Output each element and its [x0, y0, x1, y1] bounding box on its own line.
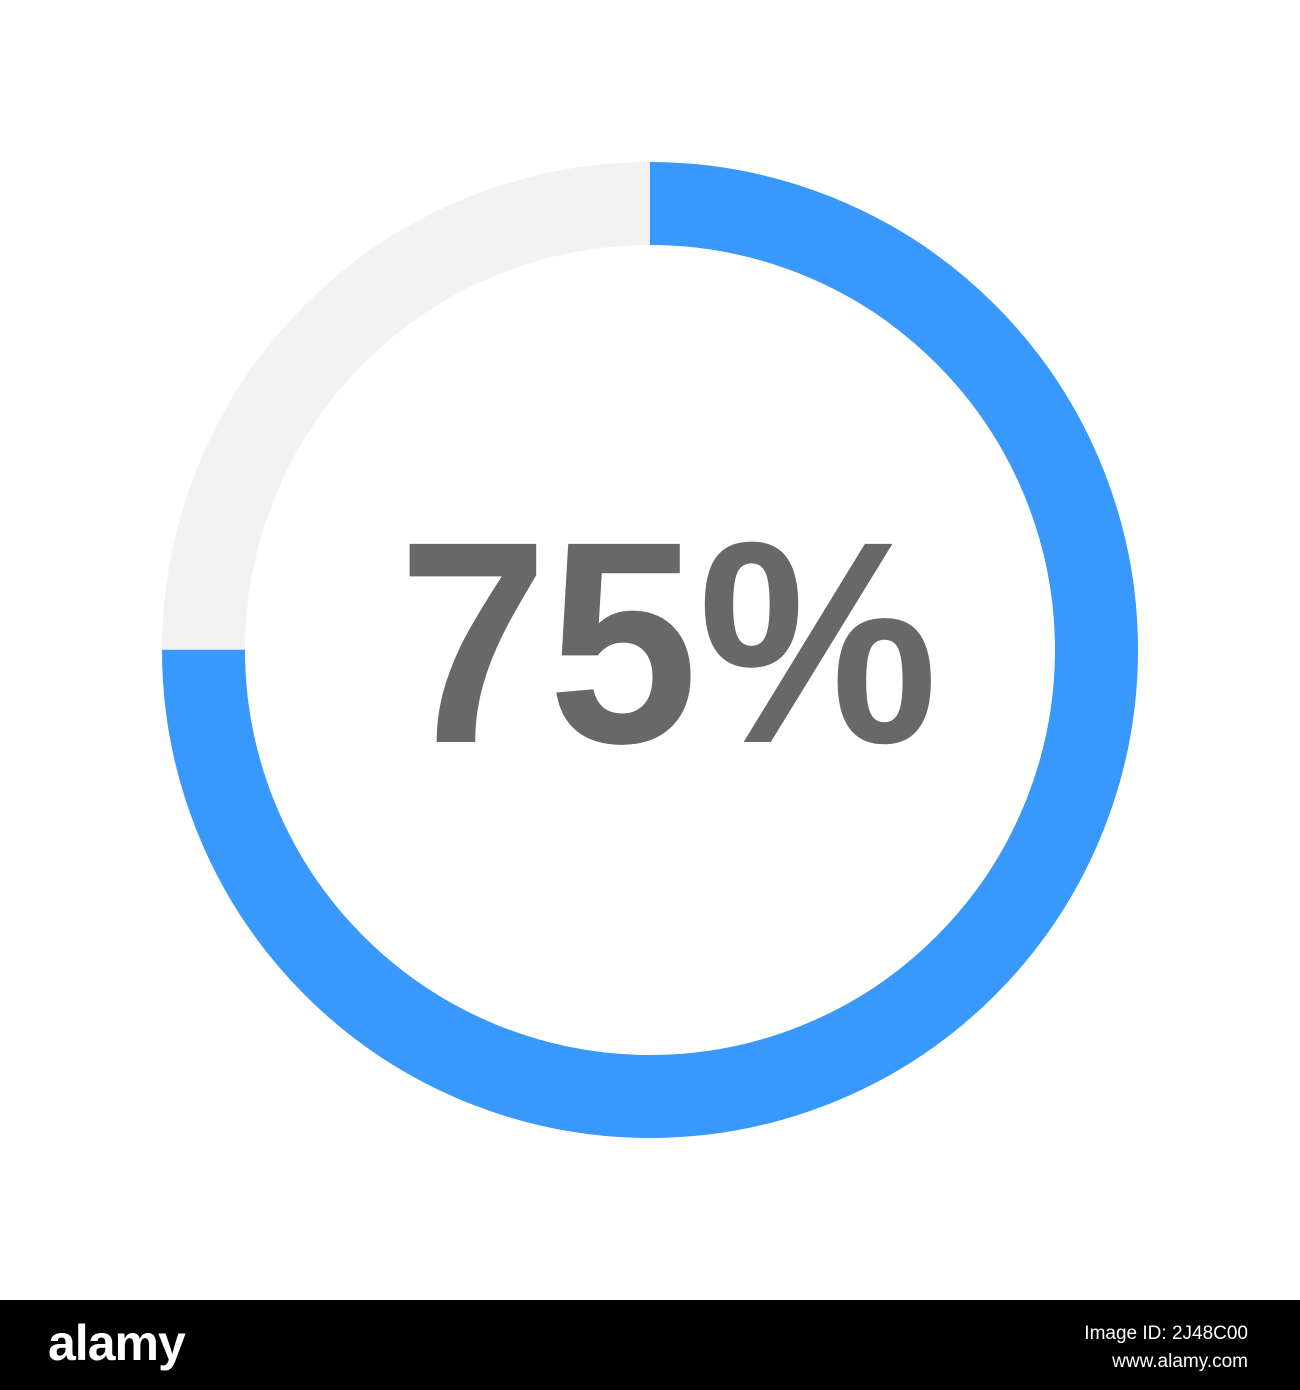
ring progress (75%) [204, 204, 1096, 1096]
footer image info: Image ID: 2J48C00 [1084, 1323, 1248, 1344]
ring track (remaining 25%) [204, 204, 1096, 1096]
percentage label: 75% [398, 482, 938, 804]
footer logo: alamy [48, 1315, 185, 1371]
footer image info: www.alamy.com [1112, 1351, 1248, 1372]
footer bar [0, 1300, 1300, 1390]
footer image info [1084, 1323, 1248, 1372]
